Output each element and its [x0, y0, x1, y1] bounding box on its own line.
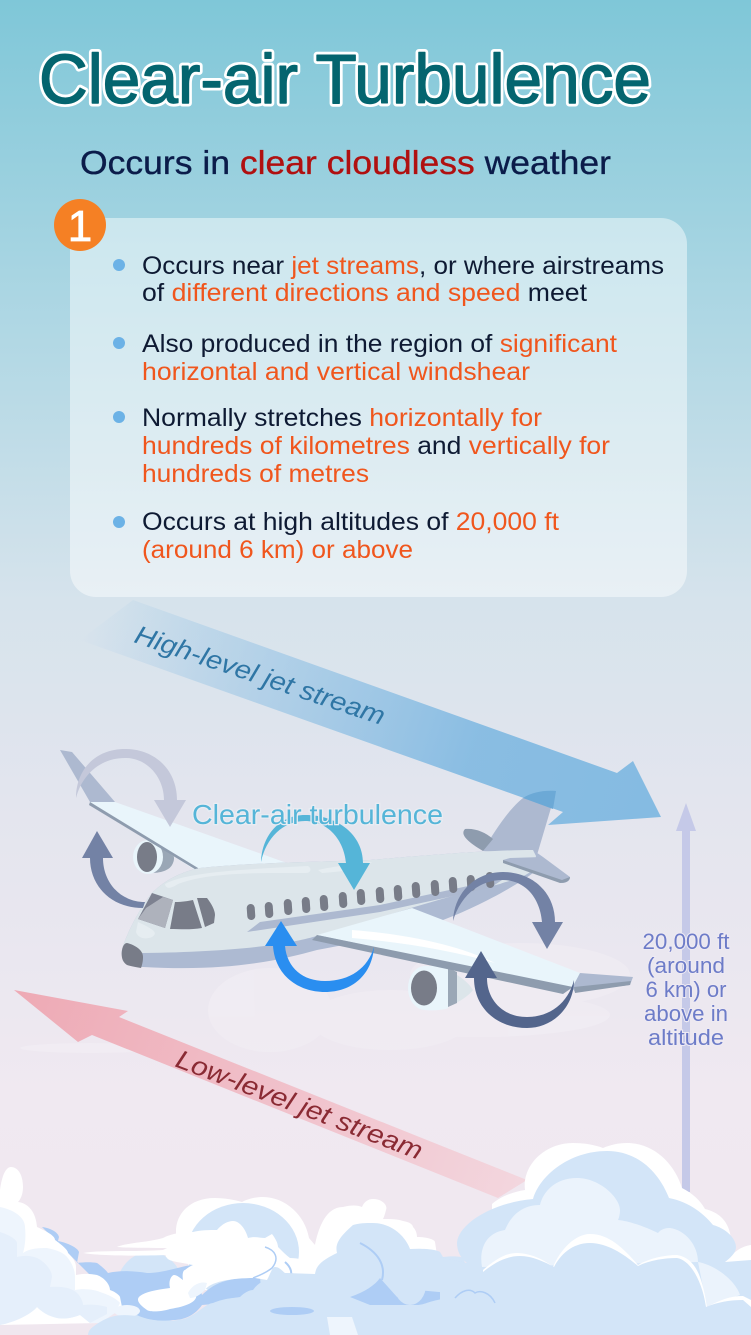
fact 4: Occurs at high altitudes of 20,000 ft: [142, 508, 559, 536]
fact 2: horizontal and vertical windshear: [142, 358, 530, 386]
clear-air turbulence label: Clear-air turbulence: [192, 799, 443, 830]
cloud: darker blue band: [42, 1227, 262, 1321]
altitude arrow: [676, 803, 696, 1192]
turbulence arrow: blue: [265, 921, 374, 992]
cloud: right main: [440, 1151, 751, 1335]
low-level jet stream label: Low-level jet stream: [172, 1044, 427, 1165]
fact 4: (around 6 km) or above: [142, 536, 413, 564]
cloud: right back: [492, 1143, 751, 1270]
fuselage: [122, 850, 543, 968]
far stabilizer: [463, 829, 493, 851]
tail fin: [483, 791, 556, 855]
turbulence arrow: dark wing: [465, 951, 574, 1028]
clouds at bottom: [0, 1143, 751, 1335]
fact 3: Normally stretches horizontally for: [142, 404, 542, 432]
airplane: [60, 750, 633, 1010]
altitude label: above in: [644, 1001, 728, 1026]
low-level jet stream arrow: [14, 990, 527, 1198]
near wing: [312, 908, 633, 994]
fact 2: Also produced in the region of significant: [142, 330, 617, 358]
cloud: center front: [88, 1223, 490, 1335]
cloud: left: [0, 1167, 140, 1325]
tail fin overlap: [523, 791, 556, 809]
far engine: [133, 840, 174, 874]
windows: [246, 872, 495, 920]
altitude label: [642, 929, 730, 1050]
title: Clear-air Turbulence: [39, 40, 651, 118]
title: Clear-air Turbulence: [39, 40, 651, 118]
turbulence arrow: slate tail: [453, 872, 563, 949]
fact 1: Occurs near jet streams, or where airstreams: [142, 252, 664, 280]
turbulence arrow: cyan: [261, 815, 370, 890]
turbulence arrow: cockpit: [82, 831, 145, 908]
altitude label: altitude: [648, 1025, 724, 1050]
altitude label: 20,000 ft: [642, 929, 730, 954]
number badge: [54, 199, 106, 251]
high-level jet stream arrow: [80, 600, 661, 825]
altitude label: (around: [647, 953, 725, 978]
fact 1: of different directions and speed meet: [142, 279, 587, 307]
panel: key facts: [70, 218, 687, 597]
cockpit: [136, 893, 215, 938]
faint background clouds: [20, 943, 630, 1053]
cloud: white middle: [83, 1221, 315, 1311]
subtitle: Occurs in clear cloudless weather: [80, 144, 611, 181]
nose: [122, 943, 143, 968]
fact 4: [113, 508, 559, 564]
fact 2: [113, 330, 617, 386]
turbulence arrow: far wing top: [76, 749, 186, 827]
high-level jet stream label: High-level jet stream: [131, 619, 389, 731]
fact 1: [113, 252, 664, 307]
near engine: [408, 966, 473, 1010]
near stabilizer: [503, 857, 570, 883]
cloud: middle back: [116, 1197, 437, 1328]
number badge: 1: [68, 202, 92, 251]
fact 3: hundreds of kilometres and vertically for: [142, 432, 610, 460]
altitude label: 6 km) or: [646, 977, 726, 1002]
fact 3: hundreds of metres: [142, 460, 369, 488]
far wing: [60, 750, 287, 872]
fact 3: [113, 404, 610, 488]
